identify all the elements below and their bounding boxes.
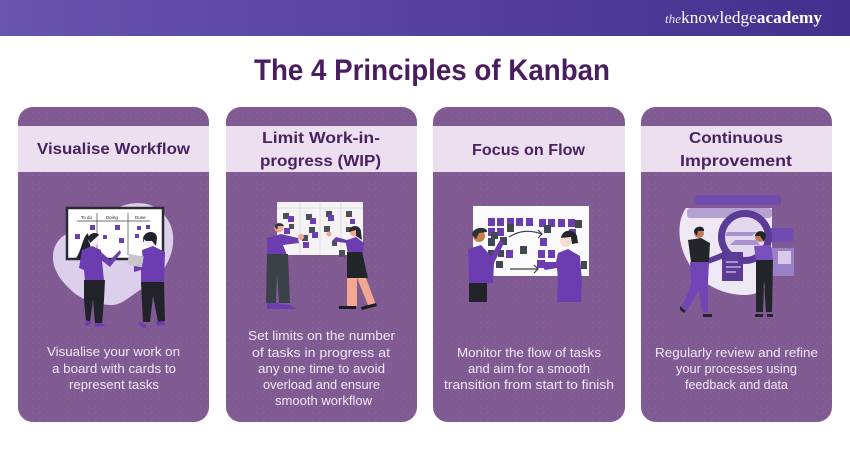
illustration: team at kanban board: Done bbox=[135, 215, 146, 220]
figure: man bbox=[468, 228, 504, 302]
heading: Visualise Workflow: Visualise Workflow bbox=[37, 141, 191, 158]
description: Regularly review and refine bbox=[655, 346, 818, 360]
figure: woman in purple dress bbox=[540, 231, 582, 302]
panel: Continuous Improvement bbox=[641, 107, 832, 422]
heading: Continuous Improvement bbox=[680, 130, 793, 170]
description: represent tasks bbox=[69, 378, 159, 392]
figure: man bbox=[127, 232, 165, 328]
description: Set limits on the number bbox=[248, 329, 395, 343]
panel: Visualise Workflow bbox=[18, 107, 209, 422]
heading: Limit Work-in-progress (WIP): progress (WIP) bbox=[260, 153, 381, 170]
description bbox=[655, 346, 818, 392]
description: feedback and data bbox=[685, 378, 788, 392]
description bbox=[444, 346, 614, 392]
heading: Focus on Flow: Focus on Flow bbox=[472, 142, 586, 159]
description: and aim for a smooth bbox=[468, 362, 590, 376]
description: smooth workflow bbox=[275, 394, 373, 408]
illustration: team at kanban board bbox=[53, 203, 173, 328]
description: Monitor the flow of tasks bbox=[457, 346, 601, 360]
description: transition from start to finish bbox=[444, 378, 614, 392]
title: The 4 Principles of Kanban bbox=[254, 54, 610, 87]
description: a board with cards to bbox=[52, 362, 176, 376]
description: of tasks in progress at bbox=[252, 346, 391, 360]
logo: the knowledge academy: theknowledgeacademy bbox=[665, 8, 822, 27]
panel: Focus on Flow bbox=[433, 107, 625, 422]
heading: Limit Work-in-progress (WIP) bbox=[260, 130, 381, 170]
illustration: team at kanban board: To do bbox=[81, 215, 93, 220]
description: Visualise your work on bbox=[47, 345, 180, 359]
illustration: team at kanban board: Doing bbox=[106, 215, 118, 220]
header banner bbox=[0, 0, 850, 36]
description: any one time to avoid bbox=[258, 362, 385, 376]
illustration: magnifier review bbox=[679, 195, 794, 317]
figure: man with pointing arm bbox=[266, 223, 304, 309]
description bbox=[47, 345, 180, 392]
heading: Limit Work-in-progress (WIP): Limit Work-in- bbox=[262, 130, 380, 147]
description: overload and ensure bbox=[263, 378, 380, 392]
description bbox=[248, 329, 395, 408]
illustration: team limiting tasks on board bbox=[266, 202, 377, 310]
panel: Limit Work-in-progress bbox=[226, 107, 417, 422]
heading: Continuous Improvement: Improvement bbox=[680, 153, 793, 170]
illustration: team following task flow bbox=[468, 206, 589, 302]
figure: woman bbox=[76, 233, 121, 327]
figure: man in black shirt bbox=[680, 227, 712, 317]
figure: woman in purple shirt bbox=[754, 231, 773, 317]
heading: Continuous Improvement: Continuous bbox=[689, 130, 783, 147]
figure: woman with skirt bbox=[326, 226, 377, 310]
description: your processes using bbox=[676, 362, 797, 376]
